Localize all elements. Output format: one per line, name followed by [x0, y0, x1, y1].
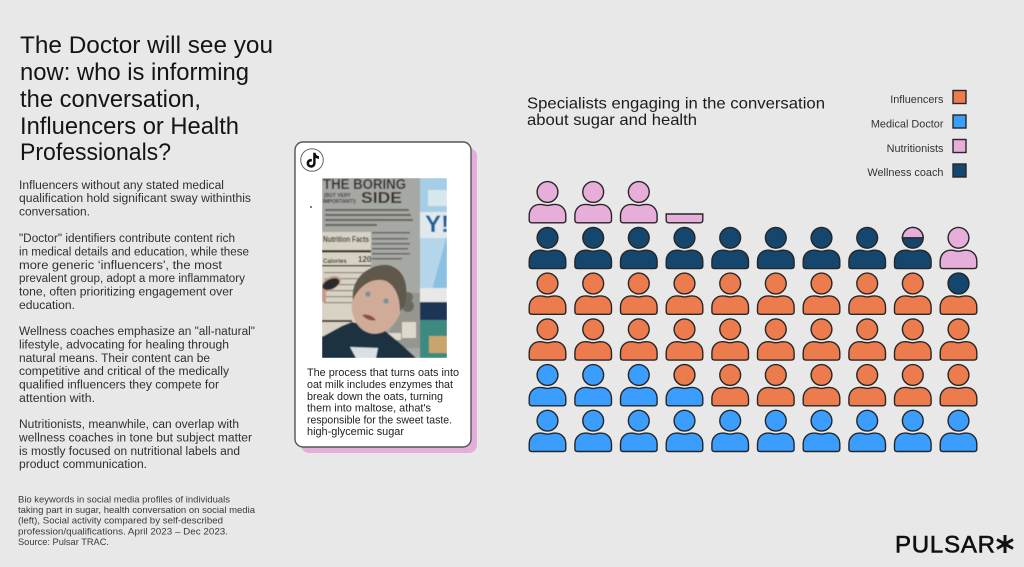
row 4: influencers: [529, 319, 977, 360]
text block: wellness coaches: Wellness coaches emphasize an "all-natural": [19, 326, 255, 338]
footnote: taking part in sugar, health conversation on social media: [18, 505, 256, 516]
image: video still of man with oat milk carton: THE BORING: [323, 177, 406, 193]
title: now: who is informing: [20, 59, 249, 86]
text block: wellness coaches: competitive and critical of the medically: [19, 366, 229, 378]
post caption: high-glycemic sugar: [307, 426, 404, 438]
title: Professionals?: [20, 139, 171, 166]
chart heading: about sugar and health: [527, 112, 697, 129]
legend: Nutritionists: Nutritionists: [887, 143, 944, 155]
legend: Influencers: Influencers: [890, 94, 944, 106]
panel: TikTok post card: [295, 142, 477, 453]
chart heading: Specialists engaging in the conversation: [527, 96, 825, 112]
text block: doctor identifiers: education.: [19, 300, 75, 312]
text block: doctor identifiers: prevalent group, adopt a more inflammatory: [19, 273, 245, 285]
footnote: [18, 494, 256, 548]
text block: influencers intro: qualification hold significant sway withinthis: [19, 193, 251, 205]
pictogram chart: people by profession: [529, 182, 977, 452]
image: video still of man with oat milk carton: Nutrition Facts: [323, 234, 369, 244]
text block: wellness coaches: attention with.: [19, 393, 95, 405]
footnote: (left), Social activity compared by self-described: [18, 516, 223, 526]
legend: Wellness coach: Wellness coach: [867, 167, 944, 179]
legend: Medical Doctor: Medical Doctor: [871, 118, 944, 130]
card pink shadow: [301, 148, 477, 453]
image: video still of man with oat milk carton: SIDE: [361, 190, 402, 207]
image: video still of man with oat milk carton: (BUT VERY: [324, 193, 351, 199]
legend: [867, 90, 966, 179]
text block: wellness coaches: qualified influencers they compete for: [19, 380, 219, 392]
stray dot: [310, 206, 312, 208]
title: the conversation,: [20, 86, 201, 113]
footnote: Source: Pulsar TRAC.: [18, 537, 109, 548]
footnote: profession/qualifications. April 2023 – Dec 2023.: [18, 526, 228, 538]
text block: doctor identifiers: more generic ‘influencers', the most: [19, 260, 223, 272]
post caption: them into maltose, athat's: [307, 402, 431, 414]
post caption: break down the oats, turning: [307, 391, 443, 403]
text block: doctor identifiers: in medical details and education, while these: [19, 246, 249, 258]
chart heading: [527, 96, 825, 129]
row 5: medical doctors then influencers: [529, 365, 977, 406]
text block: nutritionists: [18, 419, 252, 471]
row 6: medical doctors: [529, 410, 977, 452]
image: video still of man with oat milk carton: Y!: [425, 211, 449, 238]
text block: doctor identifiers: tone, often prioritizing engagement over: [19, 286, 233, 298]
card face: [295, 142, 471, 447]
text block: nutritionists: Nutritionists, meanwhile, can overlap with: [19, 419, 239, 431]
text block: influencers intro: conversation.: [19, 206, 90, 218]
image: video still of man with oat milk carton: IMPORTANT!): [323, 199, 356, 205]
text block: wellness coaches: lifestyle, advocating for healing through: [19, 340, 229, 352]
row 3: influencers: [529, 273, 977, 314]
image: video still of man with oat milk carton: 120: [358, 255, 372, 264]
post caption: oat milk includes enzymes that: [307, 379, 454, 391]
text block: doctor identifiers: "Doctor" identifiers contribute content rich: [19, 233, 235, 245]
image: video still of man with oat milk carton: Calories: [323, 259, 347, 265]
post caption: The process that turns oats into: [307, 367, 459, 379]
text block: influencers intro: Influencers without any stated medical: [19, 180, 224, 192]
text block: wellness coaches: natural means. Their content can be: [19, 353, 210, 365]
icon: TikTok logo: [301, 149, 323, 171]
icon: asterisk: [997, 535, 1013, 553]
post caption: responsible for the sweet taste.: [307, 414, 452, 426]
text block: nutritionists: product communication.: [19, 459, 147, 471]
row 1: nutritionists: [529, 182, 703, 223]
image: video still of man with oat milk carton: [321, 177, 449, 358]
post caption: [307, 367, 459, 438]
text block: nutritionists: is mostly focused on nutritional labels and: [19, 446, 240, 458]
title: The Doctor will see you: [20, 32, 273, 59]
logo: Pulsar: PULSAR: [895, 532, 995, 558]
footnote: Bio keywords in social media profiles of individuals: [18, 494, 230, 506]
title: Influencers or Health: [20, 113, 239, 140]
text block: wellness coaches: [19, 326, 255, 405]
text block: nutritionists: wellness coaches in tone but subject matter: [18, 432, 252, 444]
row 2: wellness coaches: [529, 227, 977, 269]
text block: influencers intro: [19, 180, 251, 218]
title: [20, 32, 273, 166]
text block: doctor identifiers: [19, 233, 249, 312]
